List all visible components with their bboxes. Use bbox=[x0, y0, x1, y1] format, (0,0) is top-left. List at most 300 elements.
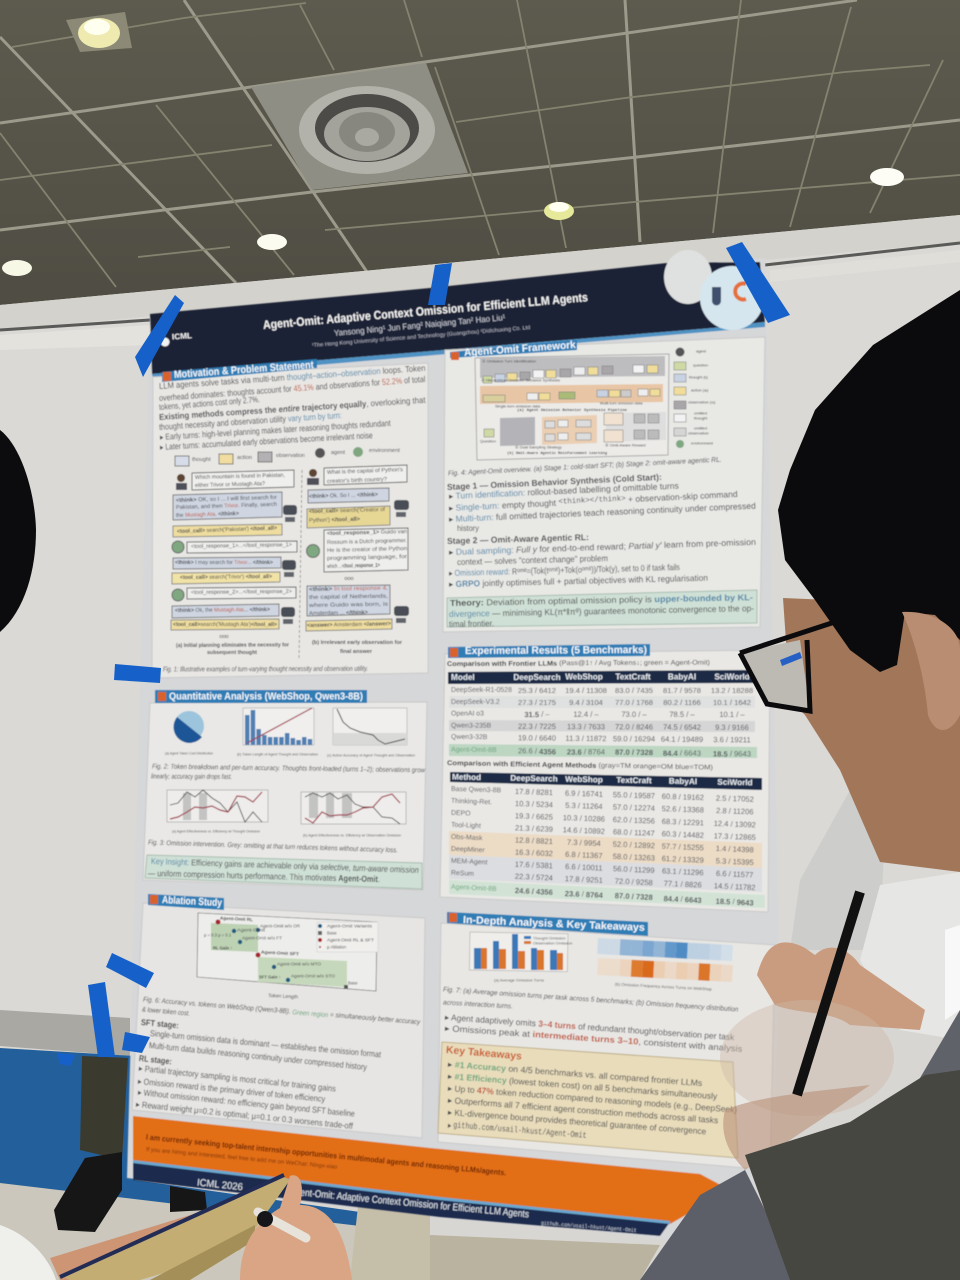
table: comparison with efficient agent methods: 21.3 / 6239 bbox=[515, 823, 553, 834]
scatter legend bbox=[317, 922, 378, 952]
marker: agent-omit RL: Agent-Omit RL bbox=[220, 916, 253, 922]
panel: experimental results bbox=[440, 644, 770, 912]
diagram: agent-omit overview: ② Hierarchical Omission Behavior Synthesis bbox=[481, 378, 560, 382]
table: comparison with efficient agent methods: 68.3 / 12291 bbox=[662, 817, 704, 828]
table: comparison with efficient agent methods: Comparison with Efficient Agent Methods (gray=TM orange=OM blue=TOM) bbox=[447, 760, 713, 772]
table: comparison with frontier LLMs: Qwen3-235B bbox=[451, 723, 492, 730]
framework text: history bbox=[457, 523, 480, 533]
legend: turn elements bbox=[175, 447, 400, 466]
key insight callout: — uniform compression hurts performance. This motivates Agent-Omit. bbox=[148, 868, 380, 884]
framework text: ▸ Omission reward: Romit=(Tok(tomit)+Tok(oomit))/Tok(y), set to 0 if task fails bbox=[449, 562, 680, 578]
ear bbox=[902, 612, 960, 730]
heatmap: omission frequency: (b) Omission Frequency Across Turns on WebShop bbox=[615, 982, 713, 992]
diagram legend: environment bbox=[691, 440, 714, 446]
diagram legend: omitted bbox=[694, 410, 707, 416]
key takeaways callout: ▸ #1 Accuracy on 4/5 benchmarks vs. all compared frontier LLMs bbox=[448, 1059, 703, 1088]
table: comparison with efficient agent methods: 16.3 / 6032 bbox=[515, 848, 553, 858]
example a: thought necessity: <tool_response_1>...</tool_response_1> bbox=[191, 542, 292, 550]
orange banner: internship notice: If you are hiring and interested, feel free to add me on WeChat: Ningx-xiao bbox=[146, 1147, 337, 1171]
table: comparison with frontier LLMs: 23.6 / 8764 bbox=[567, 747, 605, 757]
table: comparison with frontier LLMs: 10.1 / 1642 bbox=[713, 698, 751, 707]
framework text: ▸ GRPO jointly optimises full + partial objectives with KL regularisation bbox=[449, 573, 708, 589]
table: comparison with frontier LLMs: DeepSearch bbox=[513, 673, 561, 682]
heading: in-depth analysis: In-Depth Analysis & Key Takeaways bbox=[463, 914, 645, 934]
diagram: agent-omit overview: (b) Omit-Aware Agentic Reinforcement Learning bbox=[507, 451, 608, 456]
person in white shirt with lanyard bbox=[860, 872, 960, 1040]
table: comparison with efficient agent methods: Tool-Light bbox=[451, 822, 481, 830]
table: comparison with efficient agent methods: Base Qwen3-8B bbox=[451, 786, 502, 794]
table: comparison with efficient agent methods: DeepMiner bbox=[451, 846, 486, 854]
blue tape strips bbox=[57, 242, 790, 1066]
theory callout bbox=[447, 590, 757, 629]
table: comparison with efficient agent methods: 77.1 / 8826 bbox=[664, 879, 702, 890]
table: comparison with frontier LLMs: 22.3 / 7225 bbox=[518, 722, 556, 731]
panel: quantitative analysis bbox=[143, 690, 427, 890]
table: comparison with frontier LLMs: 26.6 / 4356 bbox=[518, 746, 556, 756]
table: comparison with frontier LLMs: 9.3 / 9166 bbox=[715, 723, 749, 732]
pie chart: token cost distribution: (a) Agent Token Cost Distribution bbox=[165, 750, 213, 756]
robot icon b1 bbox=[394, 500, 409, 517]
scatter chart: accuracy vs tokens: Agent-Omit w/o STO bbox=[291, 974, 336, 978]
diagram: agent-omit overview: ② Omit-Aware Reward bbox=[605, 442, 646, 448]
scatter chart: accuracy vs tokens bbox=[197, 913, 378, 1001]
legend: turn elements: thought bbox=[192, 457, 211, 463]
table: comparison with frontier LLMs: 13.2 / 18288 bbox=[711, 686, 753, 695]
legend: turn elements: agent bbox=[331, 450, 345, 456]
table: comparison with frontier LLMs: BabyAI bbox=[668, 672, 696, 682]
line chart: observation omission bbox=[301, 792, 406, 838]
example a: thought necessity: <think> Ok, the Mustagh Ata... </think> bbox=[175, 607, 271, 614]
table: comparison with efficient agent methods: 57.0 / 12274 bbox=[613, 802, 655, 813]
key takeaways callout: ▸ github.com/usail-hkust/Agent-Omit bbox=[448, 1120, 587, 1141]
framework text: context — solves "context change" problem bbox=[457, 553, 608, 567]
table: comparison with efficient agent methods bbox=[447, 760, 765, 908]
table: comparison with efficient agent methods: 6.9 / 16741 bbox=[565, 789, 603, 799]
orange banner: internship notice bbox=[133, 1116, 730, 1224]
table: comparison with frontier LLMs: 78.5 / – bbox=[669, 710, 695, 719]
table: comparison with efficient agent methods: BabyAI bbox=[669, 777, 697, 786]
table: comparison with efficient agent methods: 14.5 / 11782 bbox=[714, 881, 756, 892]
example a: thought necessity: <tool_call> search('Trivor') </tool_all> bbox=[180, 574, 273, 581]
table: comparison with efficient agent methods: 18.5 / 9643 bbox=[715, 896, 754, 907]
framework text: ▸ Single-turn: empty thought <think></think> + observation-skip command bbox=[449, 489, 738, 513]
ceiling bbox=[0, 0, 960, 310]
table: comparison with frontier LLMs: SciWorld bbox=[714, 672, 750, 682]
table: comparison with frontier LLMs: 77.0 / 1768 bbox=[615, 698, 653, 707]
table: comparison with frontier LLMs: 80.2 / 1166 bbox=[663, 698, 701, 707]
figure 2 caption: Fig. 2: Token breakdown and per-turn accuracy. Thoughts front-loaded (turns 1–2); observations grow bbox=[152, 764, 426, 774]
table: comparison with efficient agent methods: 5.3 / 11264 bbox=[565, 801, 603, 811]
table: comparison with frontier LLMs: 72.0 / 8246 bbox=[615, 722, 653, 732]
legend: turn elements: observation bbox=[276, 453, 305, 459]
table: comparison with frontier LLMs: 84.4 / 6643 bbox=[663, 748, 701, 758]
example b: observation utility: He is the creator of the Python bbox=[327, 546, 407, 554]
table: comparison with efficient agent methods: 1.4 / 14398 bbox=[716, 844, 754, 854]
scatter legend: Base bbox=[327, 930, 337, 936]
heatmap: omission frequency bbox=[597, 938, 733, 992]
table: comparison with frontier LLMs: 87.0 / 7328 bbox=[615, 748, 653, 757]
scatter chart: accuracy vs tokens: Agent-Omit bbox=[237, 928, 266, 932]
table: comparison with frontier LLMs: 3.6 / 19211 bbox=[713, 735, 751, 744]
table: comparison with efficient agent methods: MEM-Agent bbox=[451, 858, 488, 866]
table: comparison with frontier LLMs: 12.4 / – bbox=[573, 710, 599, 719]
scatter chart: accuracy vs tokens: Token Length bbox=[268, 993, 298, 1001]
table: comparison with frontier LLMs: 19.0 / 6640 bbox=[518, 733, 556, 743]
foreground person left: hair bbox=[0, 430, 36, 632]
framework text: ▸ Dual sampling: Full y for end-to-end reward; Partial y′ learn from pre-omission bbox=[449, 537, 756, 557]
key insight callout bbox=[145, 855, 422, 889]
pie chart: token cost distribution bbox=[165, 711, 213, 756]
figure 2 caption: linearly; accuracy gain drops fast. bbox=[151, 774, 232, 781]
key takeaways callout: ▸ Up to 47% token reduction compared to reasoning models (e.g., DeepSeek) bbox=[448, 1083, 738, 1115]
hand holding bottle bbox=[757, 942, 925, 1030]
figure 6 caption: Fig. 6: Accuracy vs. tokens on WebShop (Qwen3-8B). Green region = simultaneously better accuracy bbox=[143, 997, 421, 1026]
orange banner: internship notice: I am currently seeking top-talent internship opportunities in multimodal agents and reasoning LLMs/agents. bbox=[146, 1133, 507, 1177]
face bbox=[783, 590, 960, 872]
table: comparison with efficient agent methods: 58.0 / 13263 bbox=[613, 852, 655, 863]
diagram legend: omitted bbox=[694, 426, 707, 430]
example b: observation utility: <answer> Amsterdam </answer> bbox=[307, 621, 392, 629]
table: comparison with frontier LLMs: WebShop bbox=[565, 672, 603, 682]
bar chart: average omission turns bbox=[469, 932, 572, 982]
diagram legend: observation bbox=[688, 430, 709, 436]
ablation text: ▸ Reward weight μ=0.2 is optimal; μ=0.1 or 0.3 worsens trade-off bbox=[135, 1099, 354, 1131]
example b: observation utility: <tool_call> search('Creator of bbox=[309, 507, 385, 515]
framework text: ▸ Turn identification: rollout-based labelling of omittable turns bbox=[449, 481, 679, 501]
ICML logo: ICML bbox=[172, 331, 192, 341]
table: comparison with frontier LLMs: Model bbox=[451, 673, 475, 682]
table: comparison with efficient agent methods: 17.8 / 8281 bbox=[515, 787, 553, 797]
table: comparison with efficient agent methods: 24.6 / 4356 bbox=[515, 886, 553, 897]
example a: thought necessity: <tool_response_2>...</tool_response_2> bbox=[191, 589, 292, 596]
table: comparison with efficient agent methods: 22.3 / 5724 bbox=[515, 872, 553, 883]
legend: turn elements: environment bbox=[369, 448, 400, 454]
table: comparison with efficient agent methods: 57.7 / 15255 bbox=[662, 842, 704, 852]
table: comparison with efficient agent methods: 52.0 / 12892 bbox=[613, 840, 655, 850]
heading: quantitative analysis: Quantitative Analysis (WebShop, Qwen3-8B) bbox=[169, 690, 363, 702]
example b: observation utility: creator's birth country? bbox=[327, 477, 387, 485]
foreground person right: head with glasses bbox=[740, 290, 960, 872]
table: comparison with efficient agent methods: DEPO bbox=[451, 810, 471, 818]
bar chart: average omission turns: Observation Omission bbox=[533, 940, 572, 946]
plastic cup with straw bbox=[720, 892, 894, 1170]
table: comparison with efficient agent methods: Thinking-Ret. bbox=[451, 798, 492, 806]
table: comparison with frontier LLMs: 9.4 / 3104 bbox=[569, 698, 603, 707]
ablation text: ▸ Partial trajectory sampling is most critical for training gains bbox=[138, 1063, 336, 1094]
table: comparison with efficient agent methods: 7.3 / 9954 bbox=[567, 838, 601, 848]
table: comparison with frontier LLMs: 10.1 / – bbox=[719, 710, 745, 719]
table: comparison with efficient agent methods: 55.0 / 19587 bbox=[613, 790, 655, 801]
ablation text: RL stage: bbox=[138, 1053, 172, 1066]
environment icon a1 bbox=[172, 541, 184, 553]
heading: framework: Agent-Omit Framework bbox=[464, 339, 576, 359]
scatter chart: accuracy vs tokens: Base bbox=[348, 980, 358, 986]
table: comparison with frontier LLMs: 74.5 / 6542 bbox=[663, 723, 701, 732]
example a: thought necessity: Pakistan, and then Trivor. Finally, search bbox=[176, 502, 277, 511]
table: comparison with efficient agent methods: 2.5 / 17052 bbox=[716, 794, 754, 804]
table: comparison with frontier LLMs: DeepSeek-V3.2 bbox=[451, 699, 500, 706]
figure 4 caption: Fig. 4: Agent-Omit overview. (a) Stage 1: cold-start SFT; (b) Stage 2: omit-aware agentic RL. bbox=[448, 457, 722, 477]
table: comparison with frontier LLMs: 64.1 / 19489 bbox=[661, 735, 703, 744]
example b: observation utility: programming language, for bbox=[327, 554, 407, 562]
table: comparison with frontier LLMs: TextCraft bbox=[615, 672, 651, 682]
robot icon a3 bbox=[281, 607, 295, 624]
example a: thought necessity: <tool_call>search('Mustagh Ata')</tool_all> bbox=[173, 622, 278, 628]
theory callout: Theory: Deviation from optimal omission policy is upper-bounded by KL- bbox=[450, 592, 753, 608]
key insight callout: Key Insight: Efficiency gains are achievable only via selective, turn-aware omission bbox=[151, 856, 419, 875]
table: comparison with efficient agent methods: 62.0 / 13256 bbox=[613, 815, 655, 826]
ablation text: ▸ Omission reward is the primary driver of token efficiency bbox=[138, 1076, 326, 1104]
table: comparison with efficient agent methods: 17.6 / 5381 bbox=[515, 860, 553, 870]
table: comparison with efficient agent methods: 5.3 / 15395 bbox=[716, 856, 754, 867]
table: comparison with efficient agent methods: 6.6 / 11577 bbox=[716, 869, 754, 880]
example b: observation utility: Amsterdam ... </think> bbox=[309, 610, 369, 617]
table: comparison with efficient agent methods: 17.8 / 9251 bbox=[565, 874, 603, 885]
table: comparison with frontier LLMs: 13.3 / 7633 bbox=[567, 722, 605, 731]
figure 1 caption: Fig. 1: Illustrative examples of turn-varying thought necessity and observation utility. bbox=[163, 666, 368, 673]
table: comparison with efficient agent methods: SciWorld bbox=[717, 778, 753, 787]
example a: thought necessity: <tool_call> search('Pakistan') </tool_all> bbox=[177, 525, 278, 535]
example a: thought necessity: Which mountain is found in Pakistan, bbox=[195, 473, 285, 481]
example a: thought necessity: the Mustagh Ata. </think> bbox=[176, 511, 240, 519]
theory callout: timal frontier. bbox=[449, 618, 494, 629]
glasses bbox=[740, 602, 905, 711]
diagram legend: observation (oᵢ) bbox=[688, 400, 716, 404]
analysis bullets: ▸ Omissions peak at intermediate turns 3–10 , consistent with analysis bbox=[445, 1023, 743, 1054]
table: comparison with efficient agent methods: 61.2 / 13329 bbox=[661, 854, 704, 865]
ablation text: ▸ Without omission reward: no efficiency gain beyond SFT baseline bbox=[138, 1087, 356, 1119]
table: comparison with frontier LLMs: 59.0 / 16294 bbox=[613, 734, 655, 744]
table: comparison with efficient agent methods: 12.8 / 8821 bbox=[515, 835, 553, 846]
legend: turn elements: action bbox=[237, 455, 252, 461]
line chart: thought omission: (a) Agent Effectiveness vs. Efficiency w/ Thought Omission bbox=[172, 828, 260, 834]
scatter chart: accuracy vs tokens: RL Gain ↑ bbox=[213, 946, 232, 950]
diagram: agent-omit overview: Single-turn omission data bbox=[495, 404, 541, 408]
table: comparison with efficient agent methods: 6.6 / 10011 bbox=[565, 862, 603, 873]
motivation text: tokens, yet actions cost only 2.7%. bbox=[159, 394, 260, 412]
user icon a bbox=[176, 474, 187, 490]
diagram: agent-omit overview: Question bbox=[480, 438, 496, 444]
table: comparison with frontier LLMs: Qwen3-32B bbox=[451, 734, 488, 741]
diagram legend: thought (tᵢ) bbox=[689, 374, 709, 380]
environment icon a2 bbox=[172, 589, 184, 601]
table: comparison with efficient agent methods: 6.8 / 11367 bbox=[565, 850, 603, 860]
bar chart: token length per turn: (b) Token Length of Agent Thought and Observation bbox=[237, 752, 318, 756]
example a: thought necessity: ooo bbox=[219, 634, 229, 640]
table: comparison with frontier LLMs: 27.3 / 2175 bbox=[518, 698, 556, 707]
motivation text: ▸ Early turns: high-level planning makes later reasoning thoughts redundant bbox=[160, 418, 391, 442]
heading: experimental results: Experimental Results (5 Benchmarks) bbox=[465, 644, 647, 657]
ICML logo bbox=[160, 331, 192, 346]
motivation text bbox=[159, 363, 426, 452]
user icon b bbox=[307, 469, 319, 485]
motivation text: Existing methods compress the entire trajectory equally, overlooking that bbox=[159, 395, 426, 422]
table: comparison with efficient agent methods: 60.3 / 14482 bbox=[662, 829, 704, 840]
line chart: action accuracy: (c) Action Accuracy of Agent Thought and Observation bbox=[327, 752, 415, 758]
bar chart: average omission turns: Thought Omission bbox=[533, 936, 565, 940]
table: comparison with frontier LLMs: 19.4 / 11308 bbox=[565, 686, 607, 695]
table: comparison with efficient agent methods: 17.3 / 12865 bbox=[713, 831, 756, 842]
header banner bbox=[150, 250, 765, 379]
scatter chart: accuracy vs tokens: Agent-Omit w/o MTO bbox=[277, 962, 322, 966]
table: comparison with frontier LLMs: OpenAI o3 bbox=[451, 711, 484, 718]
framework text bbox=[447, 472, 756, 589]
example a: thought necessity: either Trivor or Mustagh Ata? bbox=[195, 481, 265, 489]
example a: thought necessity: <think> OK, so I ... I will first search for bbox=[176, 495, 277, 504]
table: comparison with frontier LLMs: Comparison with Frontier LLMs (Pass@1↑ / Avg Tokens↓; green = Agent-Omit) bbox=[447, 660, 710, 667]
diagram legend: action (aᵢ) bbox=[691, 388, 709, 392]
table: comparison with efficient agent methods: 2.8 / 11206 bbox=[716, 806, 754, 816]
table: comparison with efficient agent methods: 12.4 / 13092 bbox=[714, 819, 756, 830]
table: comparison with frontier LLMs: 73.0 / – bbox=[621, 710, 647, 719]
table: comparison with efficient agent methods: 60.8 / 19162 bbox=[662, 792, 704, 802]
table: comparison with efficient agent methods: DeepSearch bbox=[510, 774, 558, 784]
table: comparison with efficient agent methods: Agent-Omit-8B bbox=[451, 884, 497, 893]
motivation text: LLM agents solve tasks via multi-turn thought–action–observation loops. Token bbox=[159, 363, 426, 391]
figure 6 caption: & lower token cost. bbox=[142, 1007, 190, 1018]
example b: observation utility: which ...</tool_response_1> bbox=[326, 563, 381, 570]
figure 7 caption: across interaction turns. bbox=[443, 1000, 513, 1011]
bar chart: average omission turns: (a) Average Omission Turns bbox=[494, 978, 544, 982]
table: comparison with efficient agent methods: 19.3 / 6625 bbox=[515, 811, 553, 822]
footer bar bbox=[133, 1160, 670, 1236]
diagram: agent-omit overview: Multi-turn omission data bbox=[600, 400, 643, 406]
authors: Yansong Ning¹ Jun Fang² Naiqiang Tan² Hao Liu¹ bbox=[334, 312, 506, 338]
table: comparison with efficient agent methods: ReSum bbox=[451, 870, 474, 878]
example b: observation utility: (b) Irrelevant early observation for bbox=[312, 640, 403, 646]
table: comparison with efficient agent methods: 14.6 / 10892 bbox=[563, 825, 605, 836]
robot icon a1 bbox=[283, 505, 297, 522]
scatter chart: accuracy vs tokens: SFT Gain ↑ bbox=[259, 974, 281, 980]
table: comparison with frontier LLMs: 83.0 / 7435 bbox=[615, 686, 653, 695]
ablation text: Single-turn omission data is dominant — establishes the omission format bbox=[150, 1028, 382, 1059]
example b: observation utility: where Guido was born, is bbox=[308, 602, 388, 609]
panel: in-depth analysis and key takeaways bbox=[438, 912, 775, 1170]
table: comparison with efficient agent methods: WebShop bbox=[565, 775, 603, 784]
example a: thought necessity: subsequent thought bbox=[207, 650, 257, 656]
example a: thought necessity bbox=[171, 470, 297, 656]
table: comparison with efficient agent methods: Method bbox=[452, 773, 481, 782]
scatter legend: μ Ablation bbox=[327, 944, 347, 950]
example b: observation utility: <think> Ok. So I ... </think> bbox=[309, 492, 379, 500]
table: comparison with frontier LLMs: 11.3 / 11872 bbox=[565, 734, 607, 743]
motivation text: overhead dominates: thoughts account for 45.1% and observations for 52.2% of total bbox=[159, 374, 426, 403]
key takeaways callout: Key Takeaways bbox=[445, 1044, 522, 1063]
example b: observation utility: What is the capital of Python's bbox=[327, 467, 403, 476]
example b: observation utility: Python') </tool_all> bbox=[309, 517, 361, 524]
diagram: agent-omit overview: ① Dual Sampling Strategy bbox=[515, 444, 562, 450]
poster bbox=[127, 250, 780, 1240]
affiliations: ¹The Hong Kong University of Science and Technology (Guangzhou) ²Didichuxing Co. Ltd bbox=[312, 325, 531, 349]
marker: agent-omit SFT bbox=[256, 950, 299, 958]
panel: ablation study bbox=[132, 894, 425, 1138]
scatter chart: accuracy vs tokens: Agent-Omit w/o FT bbox=[242, 936, 282, 940]
example b: observation utility: <tool_response_1> Guido van bbox=[327, 529, 407, 537]
figure 3 caption: Fig. 3: Omission intervention. Grey: omitting at that turn reduces tokens without accuracy loss. bbox=[148, 840, 398, 854]
ablation text: SFT stage: bbox=[141, 1017, 179, 1030]
heading: ablation study: Ablation Study bbox=[162, 894, 222, 909]
table: comparison with efficient agent methods: 63.1 / 11296 bbox=[662, 866, 704, 877]
diagram: agent-omit overview bbox=[475, 354, 669, 460]
hair bbox=[778, 290, 960, 672]
scatter chart: accuracy vs tokens: μ = 0.3 μ = 0.1 bbox=[204, 932, 232, 938]
diagram: agent-omit overview: ① Omission Turn Identification bbox=[482, 358, 536, 364]
example b: observation utility: the capital of Netherlands, bbox=[309, 594, 389, 601]
scatter legend: Agent-Omit Variants bbox=[327, 924, 372, 928]
table: comparison with efficient agent methods: 84.4 / 6643 bbox=[663, 894, 702, 904]
motivation text: ▸ Later turns: accumulated early observations become irrelevant noise bbox=[160, 430, 373, 452]
key takeaways callout bbox=[438, 1042, 738, 1158]
marker: agent-omit SFT: Agent-Omit SFT bbox=[261, 950, 299, 956]
ablation text: Multi-turn data builds reasoning continuity under compressed history bbox=[148, 1040, 368, 1072]
diagram legend: thought bbox=[694, 416, 708, 420]
title: Agent-Omit: Adaptive Context Omission for Efficient LLM Agents bbox=[262, 290, 589, 332]
footer bar: ICML 2026 bbox=[196, 1178, 244, 1193]
heading: motivation: Motivation & Problem Statement bbox=[174, 359, 314, 381]
table: comparison with frontier LLMs bbox=[447, 660, 757, 758]
marker: agent-omit RL bbox=[216, 916, 253, 924]
ablation text bbox=[135, 1017, 382, 1131]
table: comparison with efficient agent methods: 23.6 / 8764 bbox=[565, 889, 604, 900]
motivation text: thought necessity and observation utility vary turn by turn: bbox=[159, 410, 342, 432]
line chart: observation omission: (b) Agent Effectiveness vs. Efficiency w/ Observation Omission bbox=[303, 832, 401, 838]
diagram legend bbox=[674, 348, 716, 448]
footer bar: Agent-Omit: Adaptive Context Omission for Efficient LLM Agents bbox=[289, 1187, 529, 1220]
theory callout: divergence — minimising KL(π*‖πθ) guarantees monotonic convergence to the op- bbox=[449, 603, 754, 619]
figure 7 caption: Fig. 7: (a) Average omission turns per task across 5 benchmarks; (b) Omission frequency distribution bbox=[443, 987, 739, 1014]
table: comparison with efficient agent methods: 72.0 / 9258 bbox=[615, 877, 653, 887]
table: comparison with efficient agent methods: 56.0 / 11299 bbox=[613, 864, 655, 875]
framework text: Stage 2 — Omit-Aware Agentic RL: bbox=[447, 532, 589, 546]
table: comparison with efficient agent methods: Obs-Mask bbox=[451, 834, 483, 842]
table: comparison with frontier LLMs: DeepSeek-R1-0528 bbox=[451, 687, 512, 694]
diagram: agent-omit overview: (a) Agent Omission Behavior Synthesis Pipeline bbox=[517, 408, 628, 413]
line chart: action accuracy bbox=[327, 708, 415, 758]
footer bar: github.com/usail-hkust/Agent-Omit bbox=[541, 1220, 637, 1234]
water bottle bbox=[790, 790, 885, 950]
robot icon b2 bbox=[394, 606, 409, 623]
table: comparison with efficient agent methods: 10.3 / 5234 bbox=[515, 799, 553, 809]
example b: observation utility: <think> In tool response 4, bbox=[309, 586, 389, 593]
table: comparison with frontier LLMs: Agent-Omit-8B bbox=[451, 747, 497, 754]
example b: observation utility: ooo bbox=[344, 576, 354, 582]
analysis bullets: ▸ Agent adaptively omits 3–4 turns of redundant thought/observation per task bbox=[445, 1012, 735, 1042]
panel: motivation and problem statement bbox=[152, 359, 428, 678]
diagram legend: agent bbox=[696, 348, 707, 354]
example a: thought necessity: (a) Initial planning eliminates the necessity for bbox=[176, 642, 290, 649]
table: comparison with efficient agent methods: 68.0 / 11247 bbox=[613, 827, 655, 838]
table: comparison with efficient agent methods: TextCraft bbox=[616, 776, 652, 785]
table: comparison with efficient agent methods: 87.0 / 7328 bbox=[615, 891, 653, 902]
table: comparison with frontier LLMs: 18.5 / 9643 bbox=[713, 749, 751, 758]
table: comparison with efficient agent methods: 10.3 / 10286 bbox=[563, 813, 605, 824]
example b: observation utility bbox=[306, 465, 409, 655]
key takeaways callout: ▸ #1 Efficiency (lowest token cost) on all 5 benchmarks simultaneously bbox=[448, 1071, 718, 1101]
key takeaways callout: ▸ Outperforms all 7 efficient agent construction methods across all tasks bbox=[448, 1095, 719, 1125]
scatter legend: Agent-Omit RL & SFT bbox=[327, 938, 374, 942]
table: comparison with frontier LLMs: 81.7 / 9578 bbox=[663, 686, 701, 695]
table: comparison with frontier LLMs: 25.3 / 6412 bbox=[518, 686, 556, 695]
environment icon b bbox=[306, 544, 320, 558]
framework text: Stage 1 — Omission Behavior Synthesis (Cold Start): bbox=[447, 472, 662, 492]
framework text: ▸ Multi-turn: full omitted trajectories teach reasoning continuity under compressed bbox=[449, 501, 756, 524]
example a: thought necessity: <think> I may search for Trivor... </think> bbox=[175, 560, 274, 566]
figure 2 caption bbox=[151, 764, 426, 781]
key takeaways callout: ▸ KL-divergence bound provides theoretical guarantee of convergence bbox=[448, 1107, 707, 1136]
diagram legend: question bbox=[693, 362, 708, 368]
example b: observation utility: Rossum is a Dutch programmer. bbox=[327, 538, 407, 546]
panel: agent-omit framework bbox=[443, 337, 765, 632]
